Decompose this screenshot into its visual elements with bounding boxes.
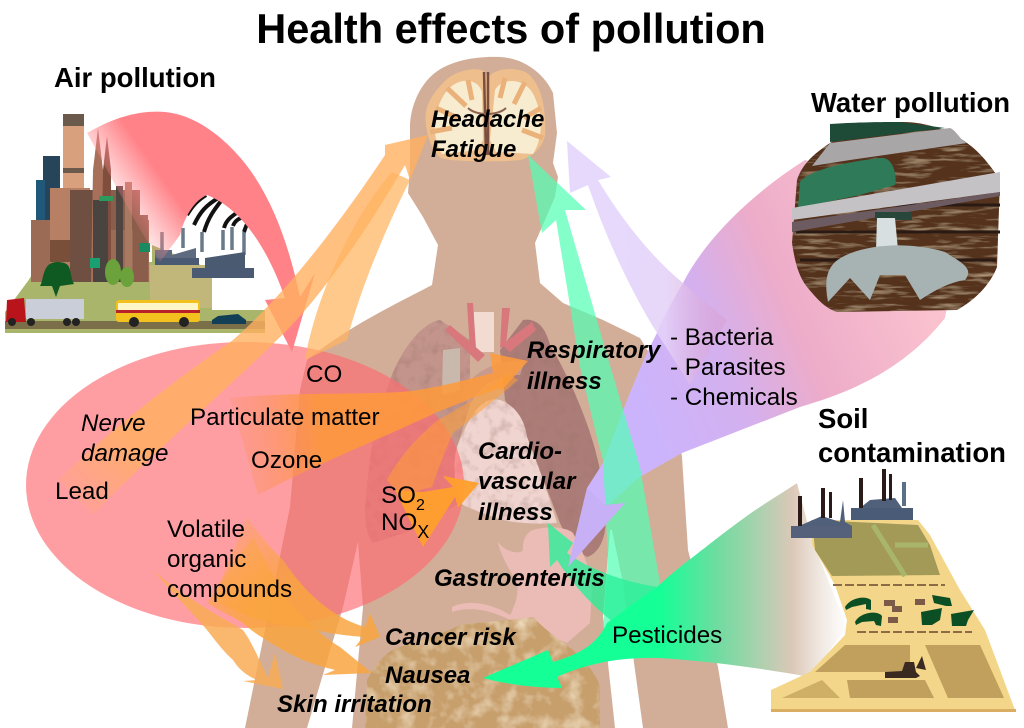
arrow: purple tip over gastroenteritis xyxy=(568,488,625,567)
illustration: air pollution city xyxy=(5,114,265,333)
label: cancer risk: Cancer risk xyxy=(385,624,517,651)
arrow to gastroenteritis xyxy=(548,523,657,625)
heading: soil contamination: Soil xyxy=(818,403,868,434)
label: NOx: X xyxy=(417,522,429,542)
windpipe and vessels xyxy=(474,312,494,352)
label: volatile organic compounds: organic xyxy=(167,546,246,573)
label: pesticides: Pesticides xyxy=(612,622,722,649)
label: SO2: SO xyxy=(381,482,416,509)
label: cardiovascular illness: vascular xyxy=(478,468,577,495)
water to bubble xyxy=(568,160,950,567)
label: water contaminants: - Bacteria xyxy=(670,324,774,351)
heart xyxy=(454,399,557,524)
label: nerve damage: Nerve xyxy=(81,410,146,437)
label: skin irritation: Skin irritation xyxy=(277,691,432,718)
arrow: water pollution cloud xyxy=(567,141,950,567)
arrow: SO2 to lungs xyxy=(387,373,518,495)
organ: lungs and heart xyxy=(365,303,605,557)
label: nausea: Nausea xyxy=(385,662,470,689)
arrow: SO2 NOx to heart xyxy=(395,476,479,547)
arrow to head xyxy=(528,155,660,628)
label: particulate matter: Particulate matter xyxy=(190,404,380,431)
arrow: VOC to cancer risk xyxy=(213,517,380,647)
factories xyxy=(791,526,852,538)
label: NOx: NO xyxy=(381,509,417,536)
label: lead: Lead xyxy=(55,478,109,505)
tractor xyxy=(885,656,926,678)
right lung xyxy=(500,320,605,557)
label: respiratory illness: illness xyxy=(527,368,602,395)
label: headache and fatigue: Fatigue xyxy=(431,136,516,163)
left lung xyxy=(365,320,470,543)
label: respiratory illness: Respiratory xyxy=(527,337,662,364)
label: cardiovascular illness: Cardio- xyxy=(478,438,562,465)
organ: intestine xyxy=(365,617,600,728)
arrow: VOC to skin irritation xyxy=(153,570,283,689)
arrow to head xyxy=(567,141,727,385)
label: water contaminants: - Chemicals xyxy=(670,384,798,411)
label: SO2: 2 xyxy=(416,497,425,514)
label: volatile organic compounds: Volatile xyxy=(167,516,245,543)
illustration: soil farmland xyxy=(771,469,1016,712)
label: gastroenteritis: Gastroenteritis xyxy=(434,565,605,592)
cows xyxy=(845,595,974,626)
title: Health effects of pollution xyxy=(256,5,766,52)
organ: brain xyxy=(426,69,545,161)
label: ozone: Ozone xyxy=(251,447,322,474)
arrow: air pollution to cloud xyxy=(87,112,315,352)
heading: water pollution: Water pollution xyxy=(811,87,1010,118)
arrow: particulate matter and ozone to lungs xyxy=(230,353,528,495)
arrow: CO to head xyxy=(305,172,410,360)
heading: soil contamination: contamination xyxy=(818,437,1006,468)
illustration: water pollution pipe photo xyxy=(792,122,1000,312)
label: water contaminants: - Parasites xyxy=(670,354,786,381)
label: CO: CO xyxy=(306,361,342,388)
label: volatile organic compounds: compounds xyxy=(167,576,292,603)
arrow: lead to head xyxy=(58,135,428,515)
label: nerve damage: damage xyxy=(81,440,168,467)
arrow to nausea xyxy=(483,483,847,688)
label: cardiovascular illness: illness xyxy=(478,499,553,526)
arrow: soil pesticides xyxy=(483,155,847,688)
label: headache and fatigue: Headache xyxy=(431,106,544,133)
human body silhouette xyxy=(245,57,728,728)
arrow: VOC to nausea xyxy=(207,537,372,675)
air pollution cloud xyxy=(26,342,464,628)
organ: stomach xyxy=(452,527,592,643)
heading: air pollution: Air pollution xyxy=(54,62,216,93)
